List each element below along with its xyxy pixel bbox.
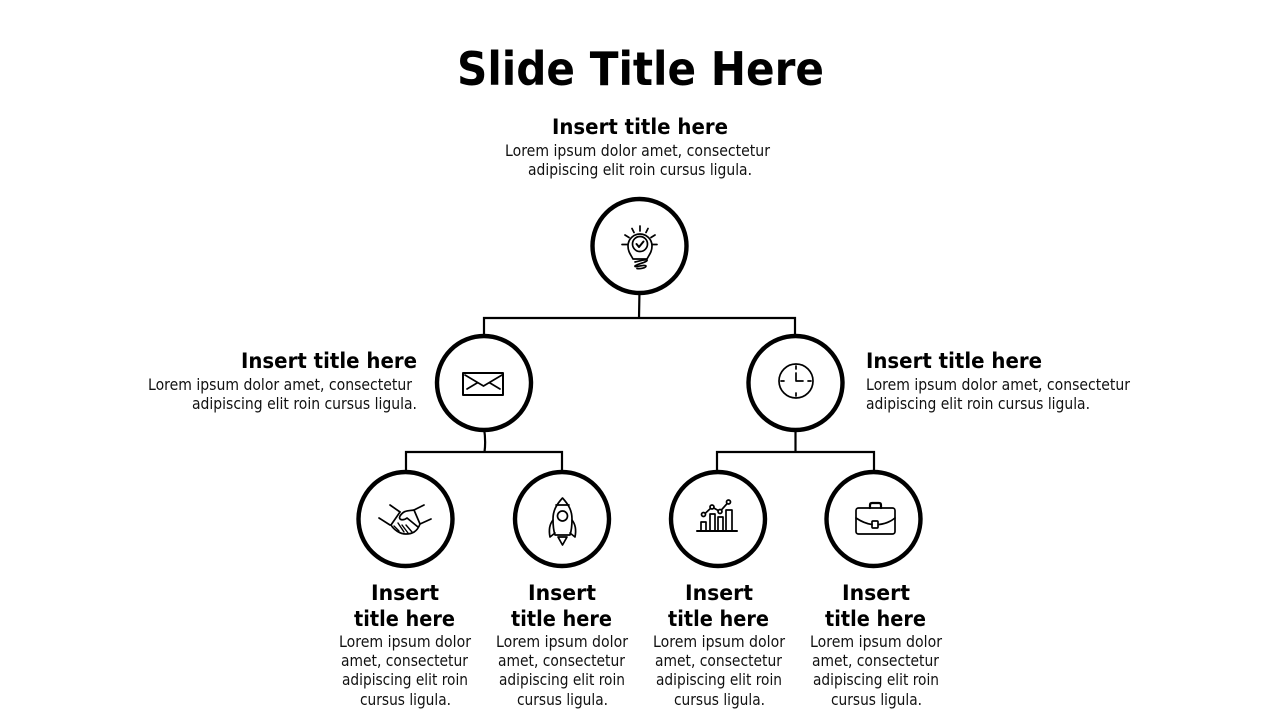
text block: bottom 3: title here	[668, 607, 769, 631]
text block: bottom 2: cursus ligula.	[517, 690, 608, 709]
text block: bottom 4: adipiscing elit roin	[813, 670, 939, 689]
node: top lightbulb	[592, 199, 686, 293]
text block: bottom 3: cursus ligula.	[674, 690, 765, 709]
text block: bottom 2: Insert	[528, 581, 596, 605]
text block: bottom 1: amet, consectetur	[341, 651, 468, 670]
text block: top	[505, 115, 770, 179]
text block: left: Lorem ipsum dolor amet, consectetur	[148, 375, 412, 394]
text block: bottom 3: adipiscing elit roin	[656, 670, 782, 689]
text block: right: Lorem ipsum dolor amet, consectetur	[866, 375, 1130, 394]
text block: top: adipiscing elit roin cursus ligula.	[528, 160, 752, 179]
text block: top: Insert title here	[552, 115, 728, 139]
text block: right: adipiscing elit roin cursus ligula.	[866, 394, 1090, 413]
text block: bottom 1: title here	[354, 607, 455, 631]
node: right clock	[748, 336, 842, 430]
text block: bottom 2: adipiscing elit roin	[499, 670, 625, 689]
text block: bottom 2: amet, consectetur	[498, 651, 625, 670]
text block: bottom 2: title here	[511, 607, 612, 631]
text block: left: adipiscing elit roin cursus ligula.	[192, 394, 417, 413]
text block: bottom 3: Insert	[685, 581, 753, 605]
text block: right: Insert title here	[866, 349, 1042, 373]
node: handshake	[358, 472, 452, 566]
text block: bottom 4: amet, consectetur	[812, 651, 939, 670]
icon: handshake	[379, 505, 431, 534]
text block: bottom 4	[810, 581, 942, 709]
node: rocket	[515, 472, 609, 566]
text block: bottom 1: adipiscing elit roin	[342, 670, 468, 689]
text block: bottom 4: cursus ligula.	[831, 690, 922, 709]
text block: bottom 2	[496, 581, 628, 709]
icon: lightbulb	[622, 226, 657, 269]
icon: growth chart	[697, 500, 737, 531]
text block: left: Insert title here	[241, 349, 417, 373]
text block: bottom 4: title here	[825, 607, 926, 631]
text block: bottom 4: Insert	[842, 581, 910, 605]
icon: briefcase	[856, 503, 895, 534]
icon: clock	[779, 364, 813, 398]
icon: rocket	[549, 498, 576, 545]
text block: bottom 3: Lorem ipsum dolor	[653, 632, 785, 651]
title: Slide Title Here	[457, 42, 824, 96]
text block: bottom 1: Lorem ipsum dolor	[339, 632, 471, 651]
text block: bottom 2: Lorem ipsum dolor	[496, 632, 628, 651]
connector lines	[406, 290, 874, 472]
node: briefcase	[826, 472, 920, 566]
text block: left	[148, 349, 417, 413]
text block: bottom 1: Insert	[371, 581, 439, 605]
icon: envelope	[463, 373, 503, 395]
node: left envelope	[437, 336, 531, 430]
text block: bottom 1: cursus ligula.	[360, 690, 451, 709]
text block: bottom 3	[653, 581, 785, 709]
node: bar chart	[671, 472, 765, 566]
text block: right	[866, 349, 1130, 413]
text block: bottom 4: Lorem ipsum dolor	[810, 632, 942, 651]
text block: bottom 1	[339, 581, 471, 709]
text block: bottom 3: amet, consectetur	[655, 651, 782, 670]
text block: top: Lorem ipsum dolor amet, consectetur	[505, 141, 770, 160]
